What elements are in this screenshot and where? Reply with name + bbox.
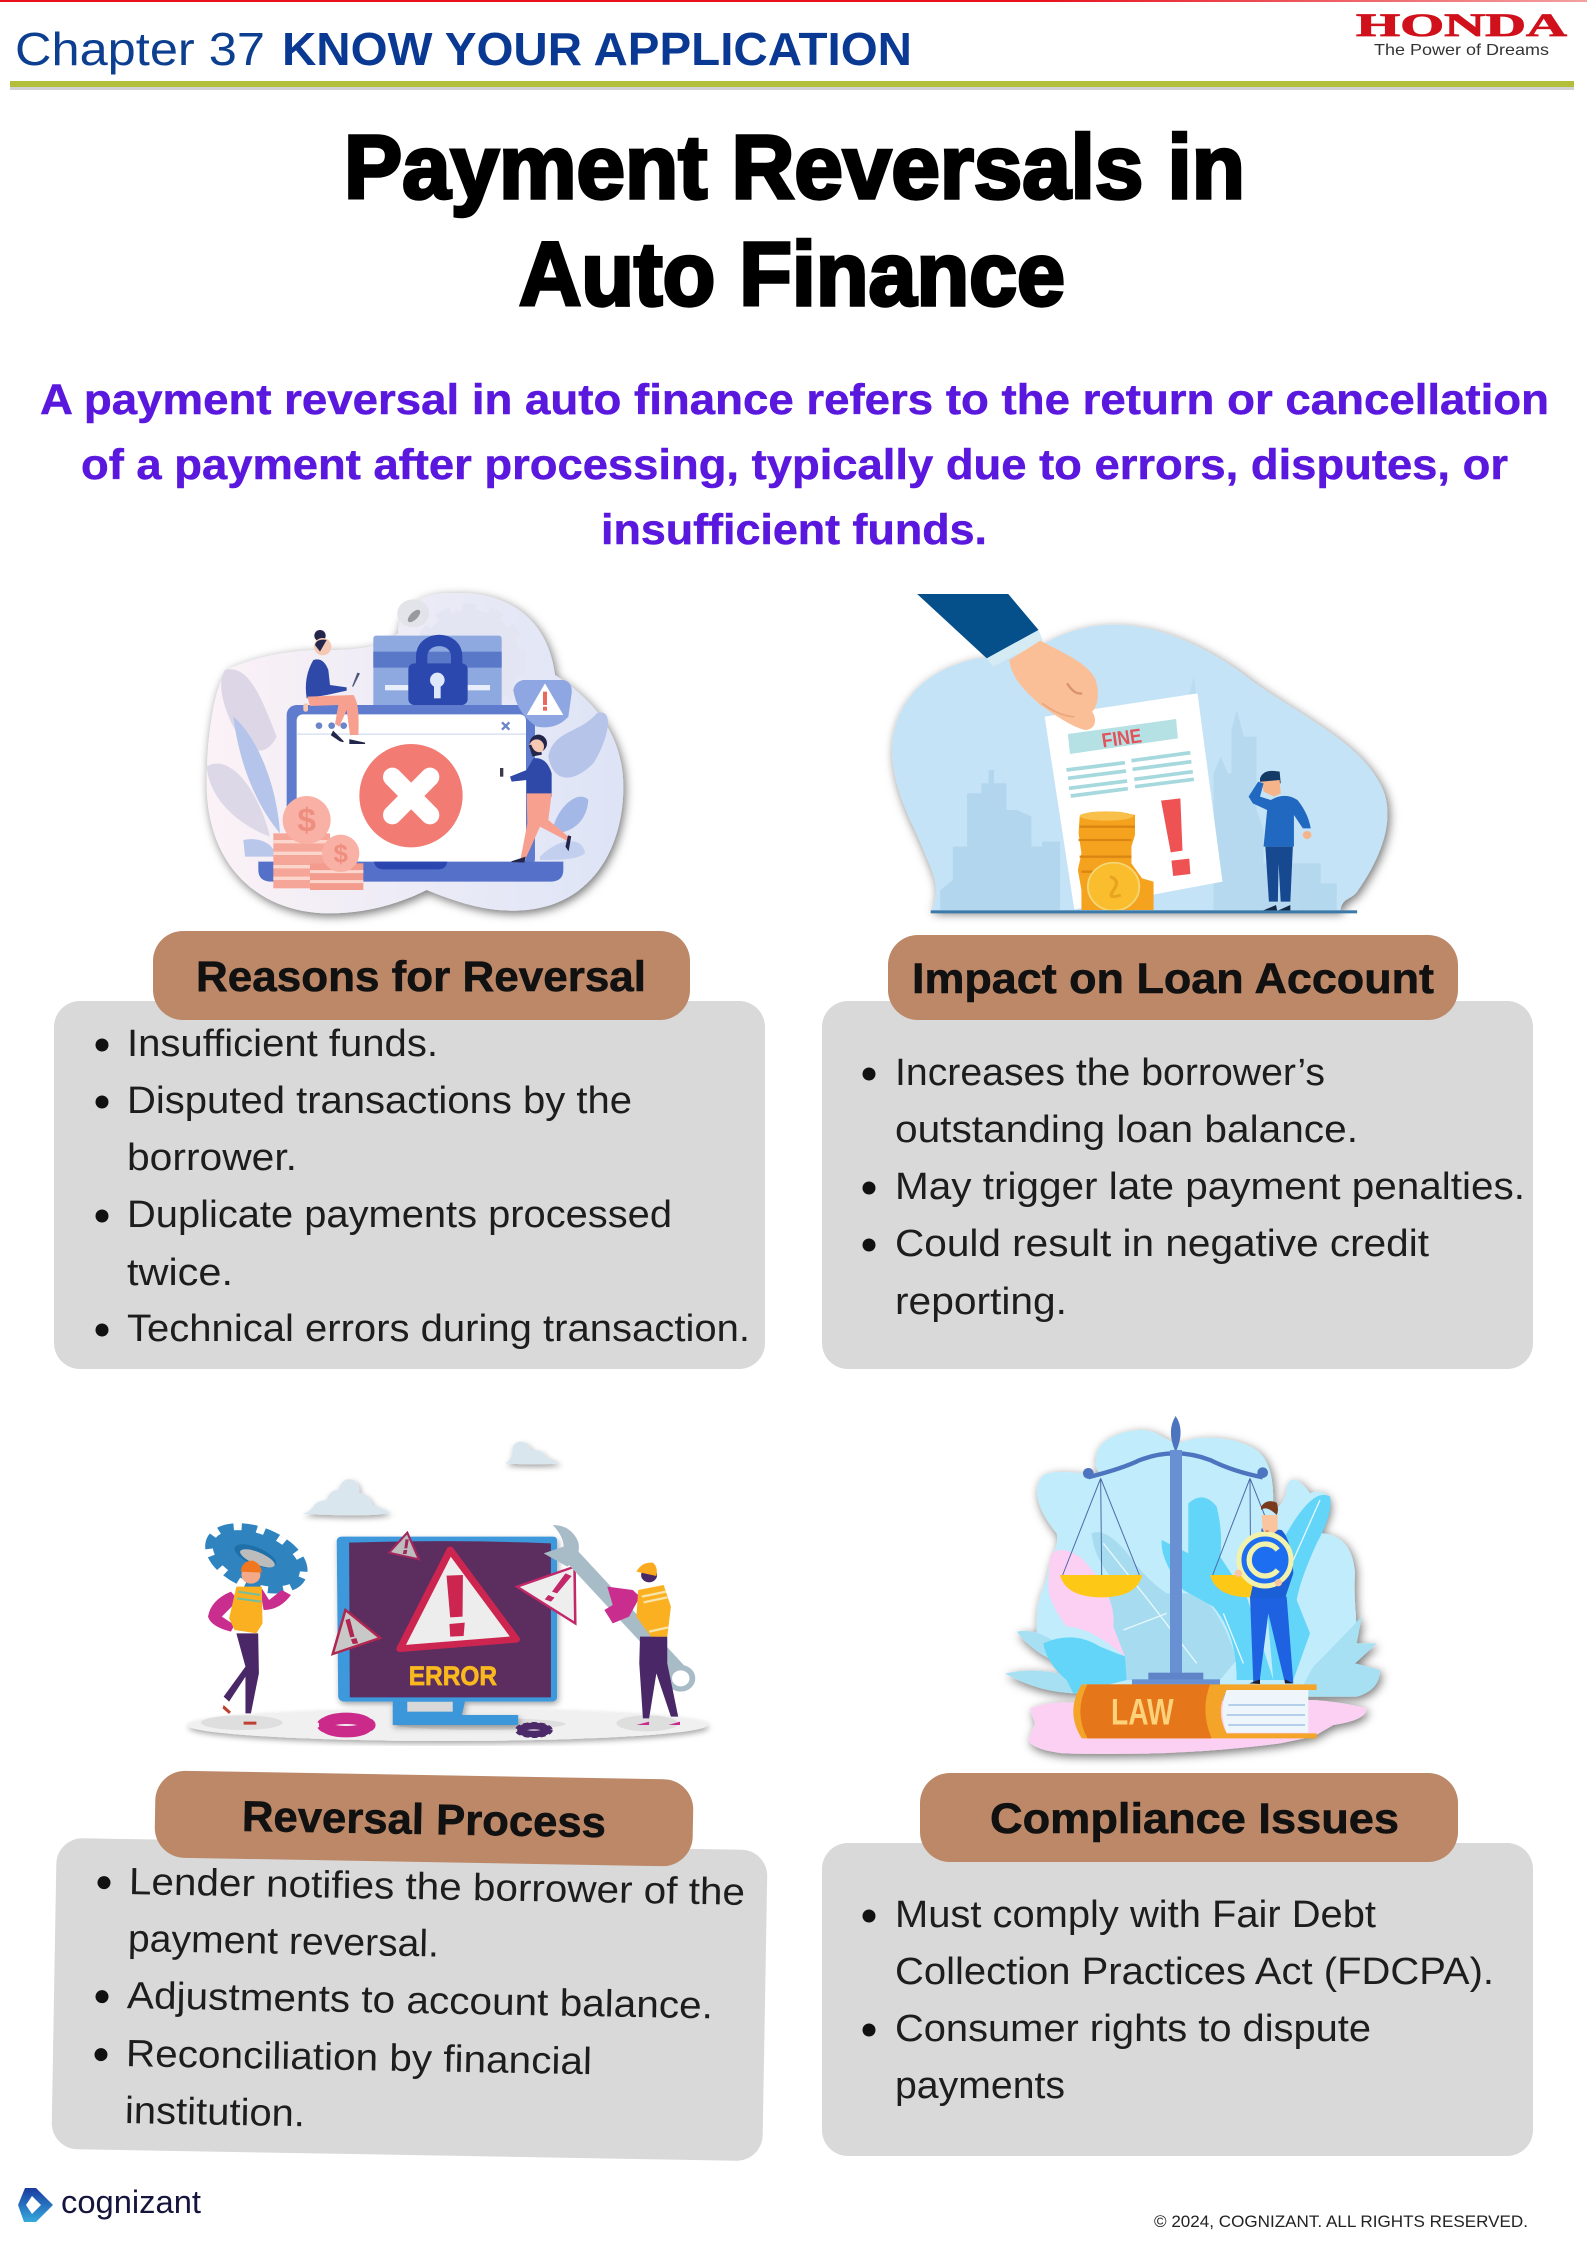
panel: impact on loan account: Could result in negative credit — [895, 1223, 1429, 1265]
panel: reasons for reversal: Disputed transactions by the — [127, 1080, 632, 1122]
panel: impact on loan account — [822, 1001, 1533, 1369]
gears — [198, 1514, 551, 1737]
panel: impact on loan account: May trigger late payment penalties. — [895, 1166, 1525, 1208]
leaves — [207, 669, 608, 860]
coin stacks: $ — [297, 803, 316, 840]
panel: reasons for reversal: Technical errors during transaction. — [127, 1308, 750, 1350]
coin stacks — [273, 796, 363, 890]
panel: compliance issues: Consumer rights to dispute — [895, 2008, 1371, 2050]
woman with laptop — [303, 630, 365, 743]
copyright notice: © 2024, COGNIZANT. ALL RIGHTS RESERVED. — [1154, 2212, 1528, 2231]
honda logo: HONDA — [1356, 8, 1567, 44]
illustration: law scale — [1005, 1416, 1380, 1754]
scale of justice — [1060, 1416, 1292, 1685]
fine document sheet: FINE — [1100, 724, 1143, 752]
background blob — [892, 625, 1387, 911]
sleeve — [917, 594, 1043, 667]
ground ellipse — [187, 1709, 707, 1741]
coin stack — [1078, 811, 1154, 911]
badge: compliance issues: Compliance Issues — [990, 1795, 1399, 1843]
intro paragraph: insufficient funds. — [601, 506, 987, 554]
panel: reasons for reversal: twice. — [127, 1252, 233, 1294]
badge: reasons for reversal — [153, 931, 690, 1020]
monitor — [337, 1537, 557, 1725]
panel: reasons for reversal: Insufficient funds. — [127, 1023, 438, 1065]
background foliage — [1005, 1430, 1380, 1754]
chapter header — [15, 23, 912, 75]
panel: reasons for reversal: borrower. — [127, 1137, 297, 1179]
foliage leaves — [1043, 1495, 1331, 1693]
panel: reasons for reversal — [54, 1001, 765, 1369]
honda logo — [1356, 8, 1567, 59]
city skyline — [940, 677, 1337, 910]
man holding copyright symbol — [1235, 1501, 1293, 1684]
title: Auto Finance — [519, 225, 1065, 325]
panel: reversal process: payment reversal. — [128, 1918, 439, 1966]
intro paragraph — [40, 376, 1549, 554]
badge: reasons for reversal: Reasons for Reversal — [196, 953, 646, 1001]
cognizant logo: cognizant — [61, 2184, 201, 2220]
laptop — [258, 705, 563, 882]
intro paragraph: A payment reversal in auto finance refers to the return or cancellation — [40, 376, 1549, 424]
small warning triangles — [333, 1533, 575, 1654]
panel: compliance issues: Must comply with Fair Debt — [895, 1894, 1376, 1936]
clouds — [303, 1442, 560, 1515]
alert bubble — [513, 680, 572, 727]
panel: impact on loan account: outstanding loan balance. — [895, 1109, 1358, 1151]
top red rule — [0, 0, 1587, 2]
ground line — [931, 910, 1357, 913]
illustration: payment declined laptop — [207, 593, 623, 913]
hand — [1009, 641, 1098, 730]
illustration: error monitor — [187, 1442, 707, 1741]
header green rule — [10, 81, 1574, 90]
error cross — [359, 744, 463, 847]
chapter header: Chapter 37 — [15, 23, 265, 75]
panel: compliance issues: Collection Practices Act (FDCPA). — [895, 1951, 1494, 1993]
intro paragraph: of a payment after processing, typically due to errors, disputes, or — [81, 441, 1508, 489]
panel: reversal process: Adjustments to account balance. — [127, 1975, 713, 2027]
panel: reversal process: Reconciliation by financial — [126, 2033, 592, 2083]
panel: reversal process: Lender notifies the borrower of the — [129, 1861, 745, 1914]
worried man — [1249, 771, 1311, 911]
wrench — [544, 1525, 692, 1689]
fine document sheet — [1045, 693, 1222, 909]
title: Payment Reversals in — [344, 118, 1245, 218]
coin stacks: $ — [333, 839, 348, 869]
worker left — [208, 1561, 291, 1725]
honda logo: The Power of Dreams — [1374, 42, 1549, 59]
badge: reversal process: Reversal Process — [242, 1793, 606, 1847]
credit card and padlock — [373, 636, 502, 707]
gear — [397, 599, 520, 710]
error label: ERROR — [409, 1661, 497, 1691]
badge: compliance issues — [920, 1773, 1458, 1862]
chapter header: KNOW YOUR APPLICATION — [282, 23, 912, 75]
law book: LAW — [1111, 1691, 1174, 1733]
law book — [1073, 1684, 1317, 1738]
big warning triangle — [400, 1550, 516, 1649]
man with phone — [500, 735, 571, 862]
background blob — [207, 593, 623, 913]
panel: reversal process — [51, 1838, 768, 2161]
illustration: fine document — [892, 594, 1387, 913]
panel: impact on loan account: Increases the borrower’s — [895, 1052, 1325, 1094]
panel: compliance issues: payments — [895, 2065, 1065, 2107]
panel: impact on loan account: reporting. — [895, 1281, 1067, 1323]
worker right — [604, 1563, 680, 1725]
panel: reversal process: institution. — [125, 2090, 305, 2135]
badge: reversal process — [154, 1770, 694, 1867]
badge: impact on loan account — [888, 935, 1458, 1020]
panel: reasons for reversal: Duplicate payments processed — [127, 1194, 672, 1236]
panel: compliance issues — [822, 1843, 1533, 2156]
title — [344, 118, 1245, 325]
badge: impact on loan account: Impact on Loan Account — [912, 955, 1434, 1003]
